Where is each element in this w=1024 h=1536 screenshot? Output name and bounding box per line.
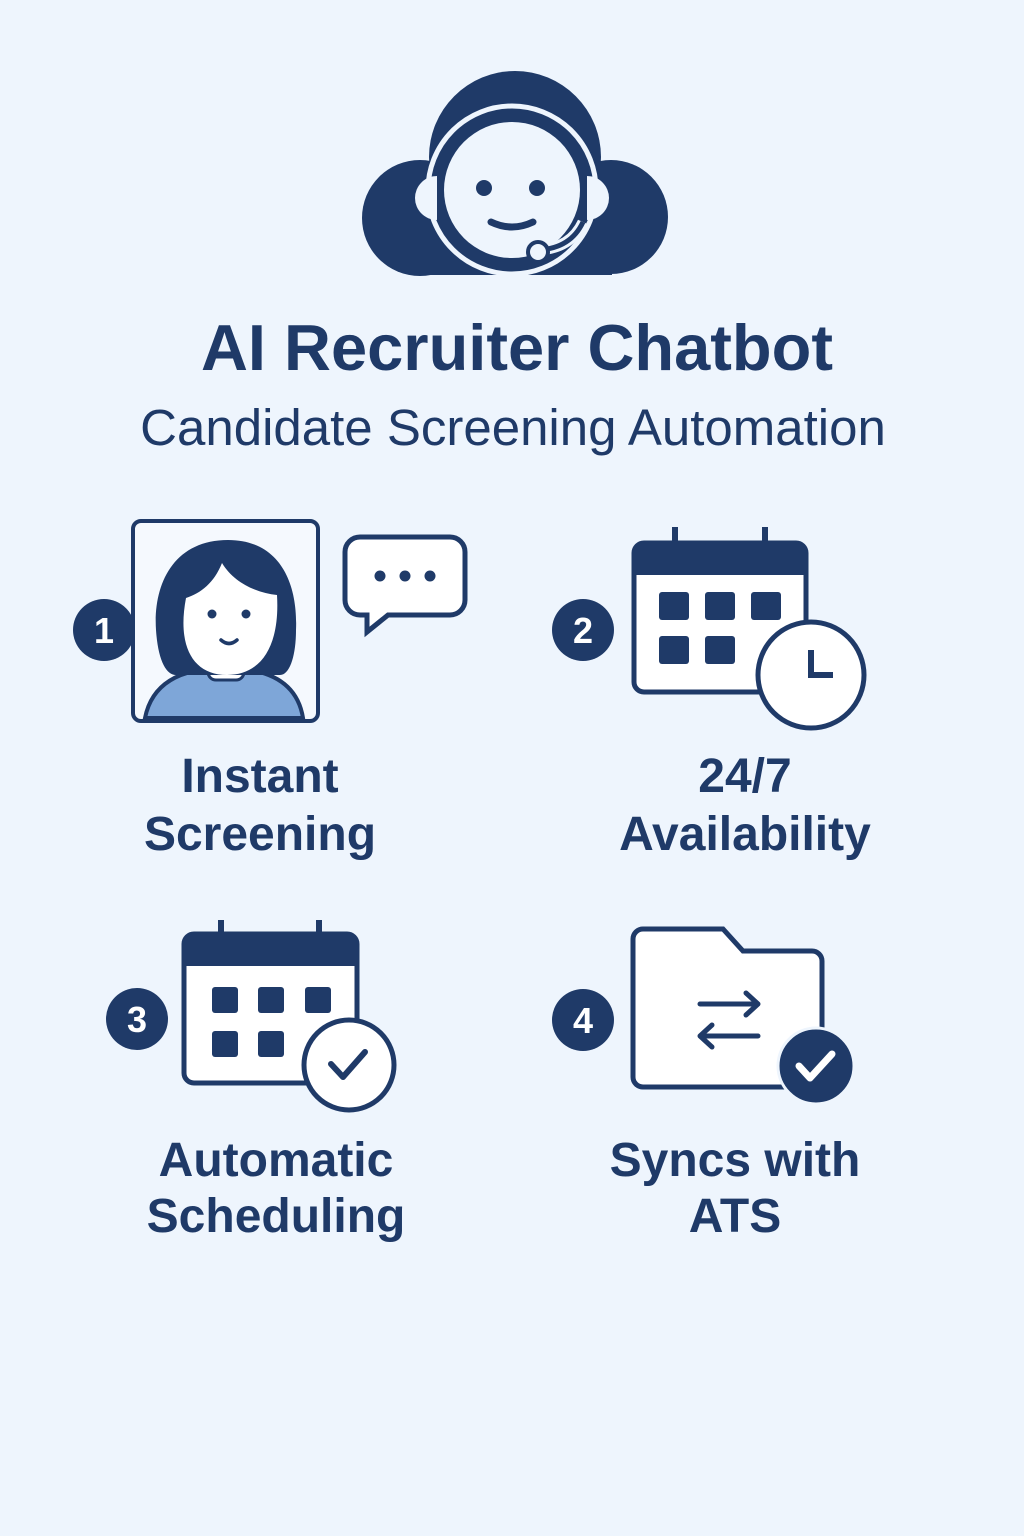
label: instant screening: Screening xyxy=(144,808,376,861)
panel: instant screening xyxy=(73,521,465,861)
badge: 1: 1 xyxy=(94,610,114,651)
badge: 4 xyxy=(552,989,614,1051)
panel: automatic scheduling xyxy=(106,920,405,1243)
label: syncs with ATS: ATS xyxy=(689,1190,781,1243)
badge: 1 xyxy=(73,599,135,661)
icon: calendar check xyxy=(184,920,394,1110)
label: 24/7 availability: 24/7 xyxy=(698,750,792,803)
icon: candidate photo xyxy=(133,521,318,721)
badge: 2 xyxy=(552,599,614,661)
subtitle: Candidate Screening Automation xyxy=(140,399,886,456)
title: AI Recruiter Chatbot xyxy=(201,311,833,384)
icon: calendar clock xyxy=(634,527,864,728)
label: automatic scheduling: Scheduling xyxy=(147,1190,405,1243)
label: 24/7 availability: Availability xyxy=(619,808,871,861)
label: syncs with ATS: Syncs with xyxy=(610,1134,860,1187)
label: automatic scheduling: Automatic xyxy=(159,1134,393,1187)
badge: 2: 2 xyxy=(573,610,593,651)
badge: 3 xyxy=(106,988,168,1050)
icon: speech bubble xyxy=(345,537,465,632)
badge: 3: 3 xyxy=(127,999,147,1040)
icon: cloud chatbot xyxy=(362,71,668,276)
label: instant screening: Instant xyxy=(181,750,339,803)
panel: syncs with ATS xyxy=(552,929,860,1243)
panel: 24/7 availability xyxy=(552,527,871,861)
badge: 4: 4 xyxy=(573,1000,593,1041)
icon: folder sync xyxy=(633,929,854,1104)
